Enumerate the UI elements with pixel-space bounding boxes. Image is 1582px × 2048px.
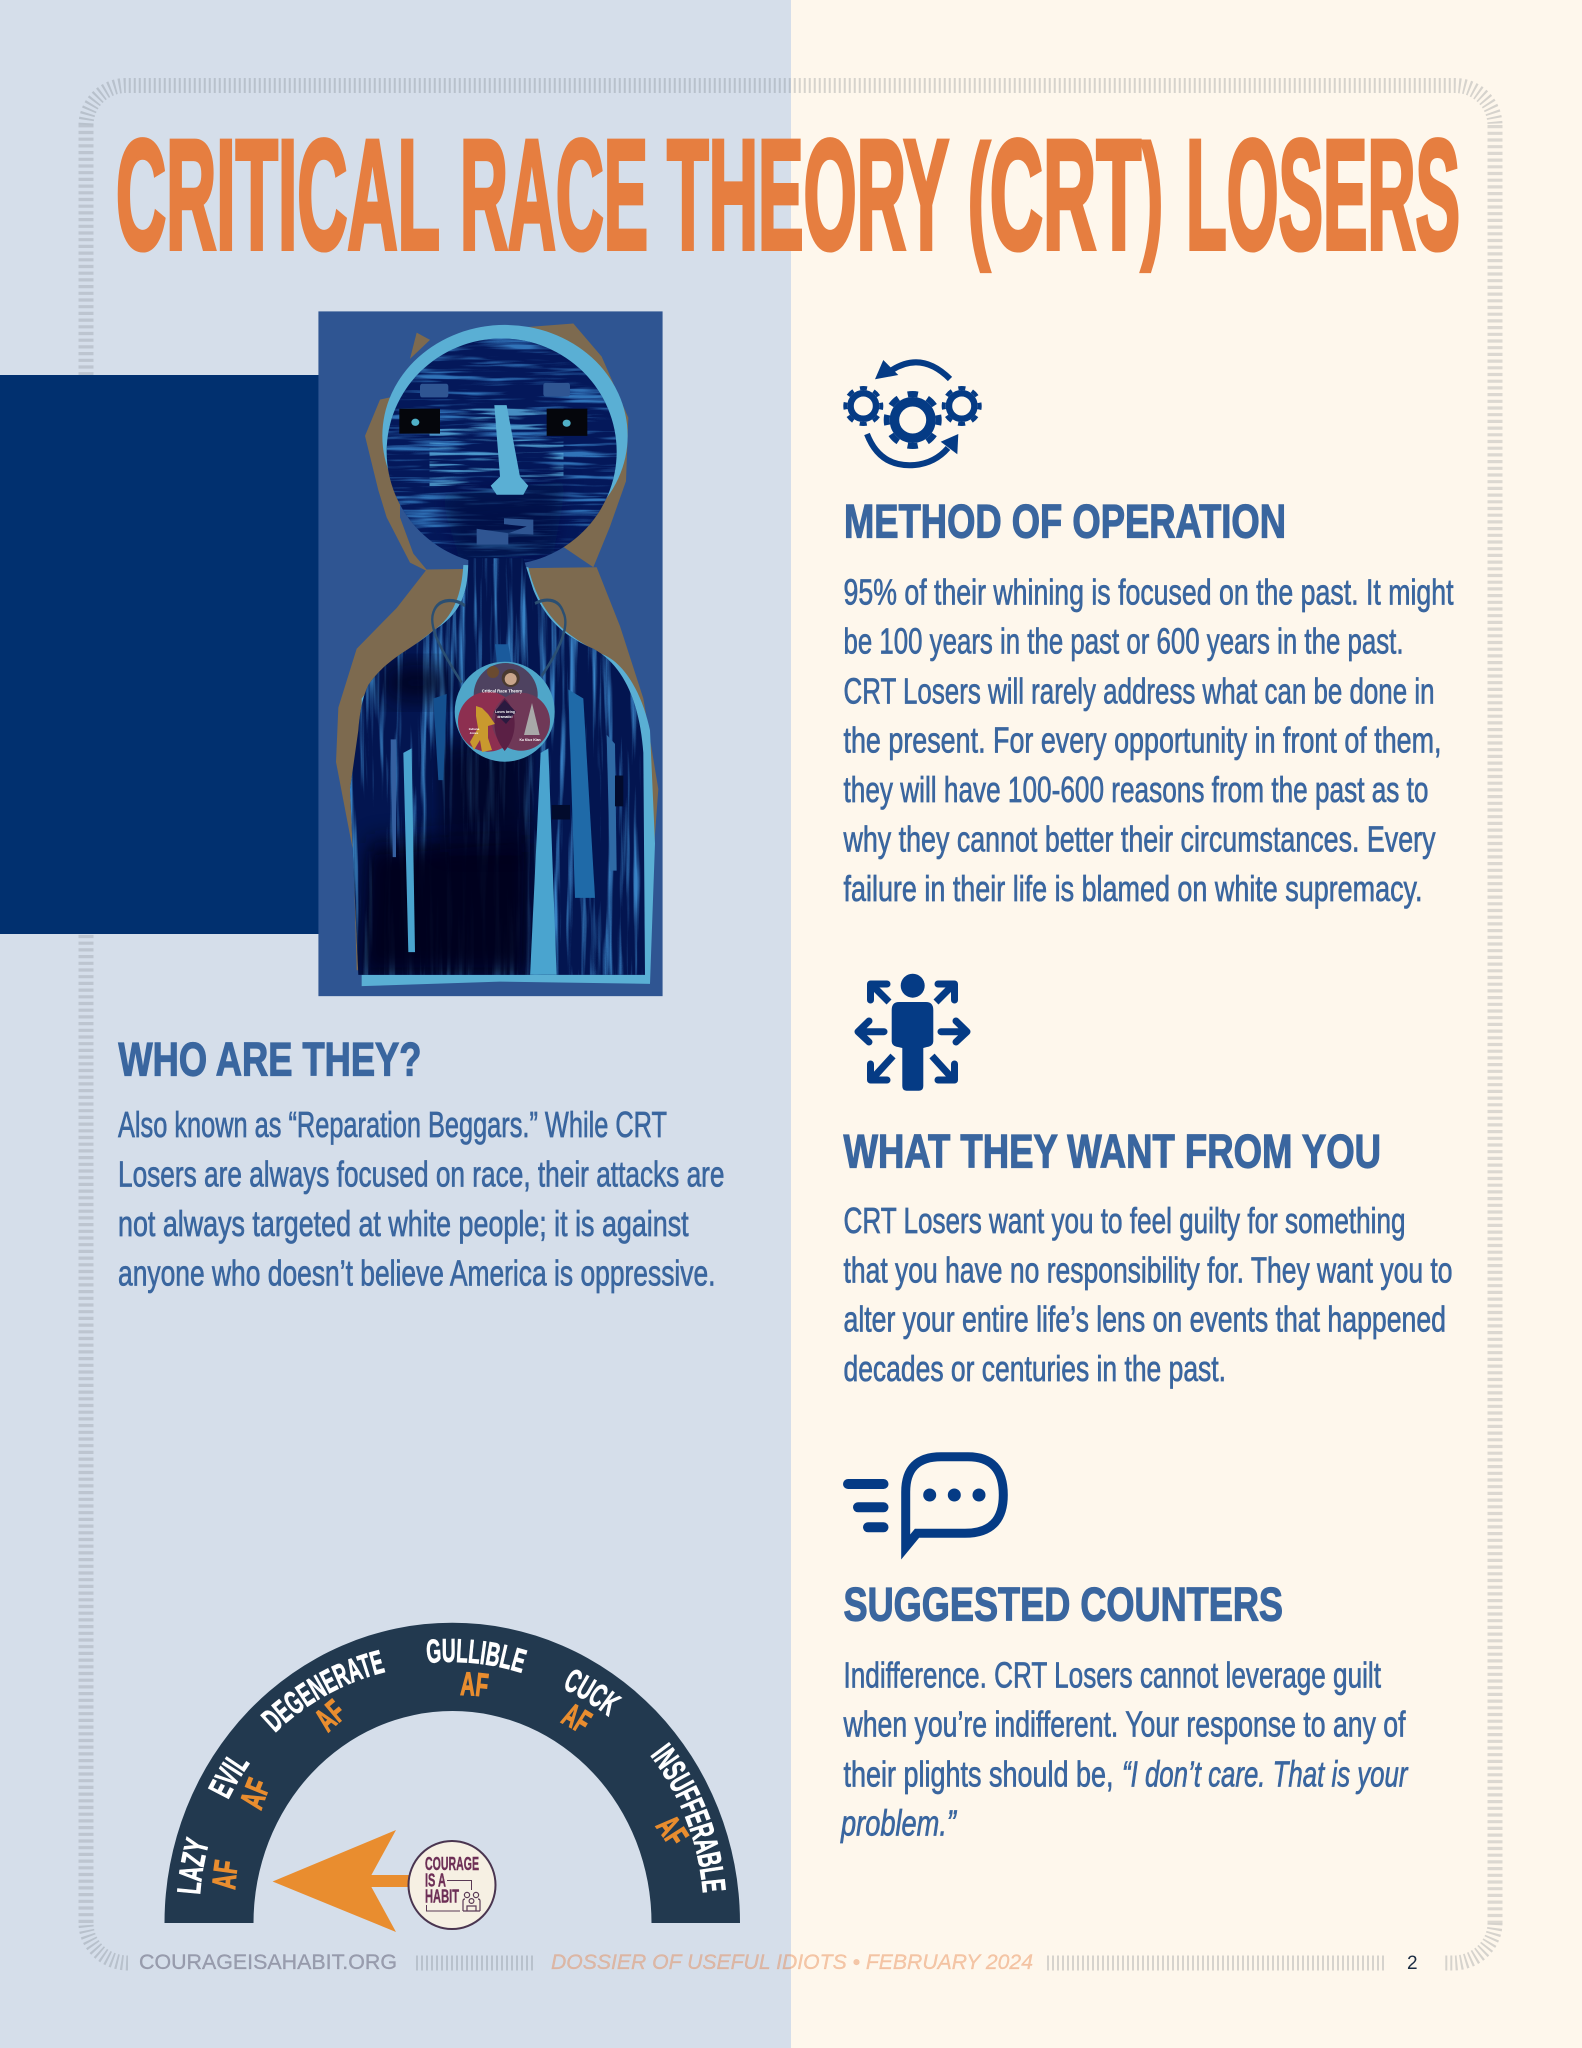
section: suggested counters [840, 1578, 1409, 1844]
text block: suggested counters: their plights should be, [844, 1753, 1114, 1794]
title: THEORY [667, 108, 949, 282]
gauge labels: AF [240, 1776, 268, 1812]
panel: left background [0, 0, 791, 2048]
heading: what they want from you: WHAT THEY WANT FROM YOU [844, 1124, 1381, 1178]
text block: who are they [118, 1104, 724, 1293]
text block: who are they: Losers are always focused on race, their attacks are [118, 1153, 724, 1194]
section: who are they [118, 1033, 724, 1293]
footer: dossier line: DOSSIER OF USEFUL IDIOTS • FEBRUARY 2024 [551, 1951, 1033, 1974]
text block: what they want from you [844, 1200, 1452, 1389]
gauge labels: INSUFFERABLE [650, 1742, 726, 1893]
logo: courage is a habit [408, 1841, 496, 1929]
gauge labels: LAZY [177, 1836, 208, 1894]
title: CRITICAL [116, 108, 440, 282]
heading: method of operation: METHOD OF OPERATION [844, 494, 1286, 548]
text block: suggested counters: Indifference. CRT Losers cannot leverage guilt [844, 1654, 1381, 1695]
logo: courage is a habit: IS A [425, 1870, 446, 1890]
text block: suggested counters: problem.” [840, 1803, 958, 1844]
title: RACE [460, 108, 648, 282]
text block: what they want from you: decades or centuries in the past. [844, 1348, 1226, 1389]
logo: courage is a habit: HABIT [425, 1886, 459, 1906]
footer: page number: 2 [1407, 1953, 1418, 1974]
gauge labels: EVIL [208, 1756, 250, 1800]
gauge labels [177, 1638, 726, 1894]
footer [139, 1951, 1418, 1974]
gauge labels: AF [212, 1859, 238, 1890]
gauge labels: AF [316, 1698, 342, 1734]
text block: suggested counters: when you’re indifferent. Your response to any of [843, 1704, 1406, 1745]
text block: suggested counters: “I don’t care. That is your [1122, 1753, 1409, 1794]
medallion: venn diagram: Jones [470, 731, 479, 735]
gauge labels: CUCK [565, 1670, 622, 1718]
medallion: venn diagram: dramatic! [497, 715, 513, 719]
heading: suggested counters: SUGGESTED COUNTERS [844, 1578, 1283, 1630]
text block: suggested counters [840, 1654, 1409, 1844]
text block: who are they: anyone who doesn’t believe America is oppressive. [118, 1252, 716, 1293]
gauge labels: AF [654, 1816, 690, 1844]
gauge labels: DEGENERATE [260, 1650, 386, 1733]
title: ( [968, 118, 1014, 272]
medallion: venn diagram: Indiana [469, 727, 480, 731]
navy accent block [0, 375, 319, 934]
title [116, 108, 1460, 282]
gauge labels: AF [560, 1704, 594, 1732]
gauge labels: GULLIBLE [426, 1638, 528, 1674]
footer: website: COURAGEISAHABIT.ORG [139, 1951, 397, 1974]
arrow [273, 1830, 415, 1932]
section: what they want from you [844, 1124, 1452, 1389]
logo: courage is a habit: COURAGE [425, 1854, 479, 1874]
heading: who are they: WHO ARE THEY? [118, 1033, 421, 1086]
section: method of operation [843, 494, 1454, 909]
text block: who are they: Also known as “Reparation Beggars.” While CRT [118, 1104, 667, 1145]
medallion: venn diagram: Loves being [495, 710, 515, 714]
text block: method of operation [843, 571, 1454, 909]
gauge arc [164, 1623, 740, 1923]
panel: right background [791, 0, 1582, 2048]
text block: who are they: not always targeted at white people; it is against [118, 1203, 689, 1244]
gauge labels: AF [460, 1672, 490, 1696]
icon: gears with rotating arrows [845, 360, 980, 465]
illustration: painted figure [318, 311, 663, 996]
medallion: venn diagram: Ku Klux Klan [519, 738, 541, 742]
title: ) [1141, 118, 1163, 272]
gauge: AF scale [164, 1622, 740, 1932]
title: CRT [990, 108, 1141, 282]
medallion: venn diagram [455, 662, 555, 762]
icon: speech bubble [848, 1457, 1003, 1547]
icon: person with arrows [858, 974, 967, 1091]
medallion: venn diagram: Critical Race Theory [482, 688, 523, 694]
